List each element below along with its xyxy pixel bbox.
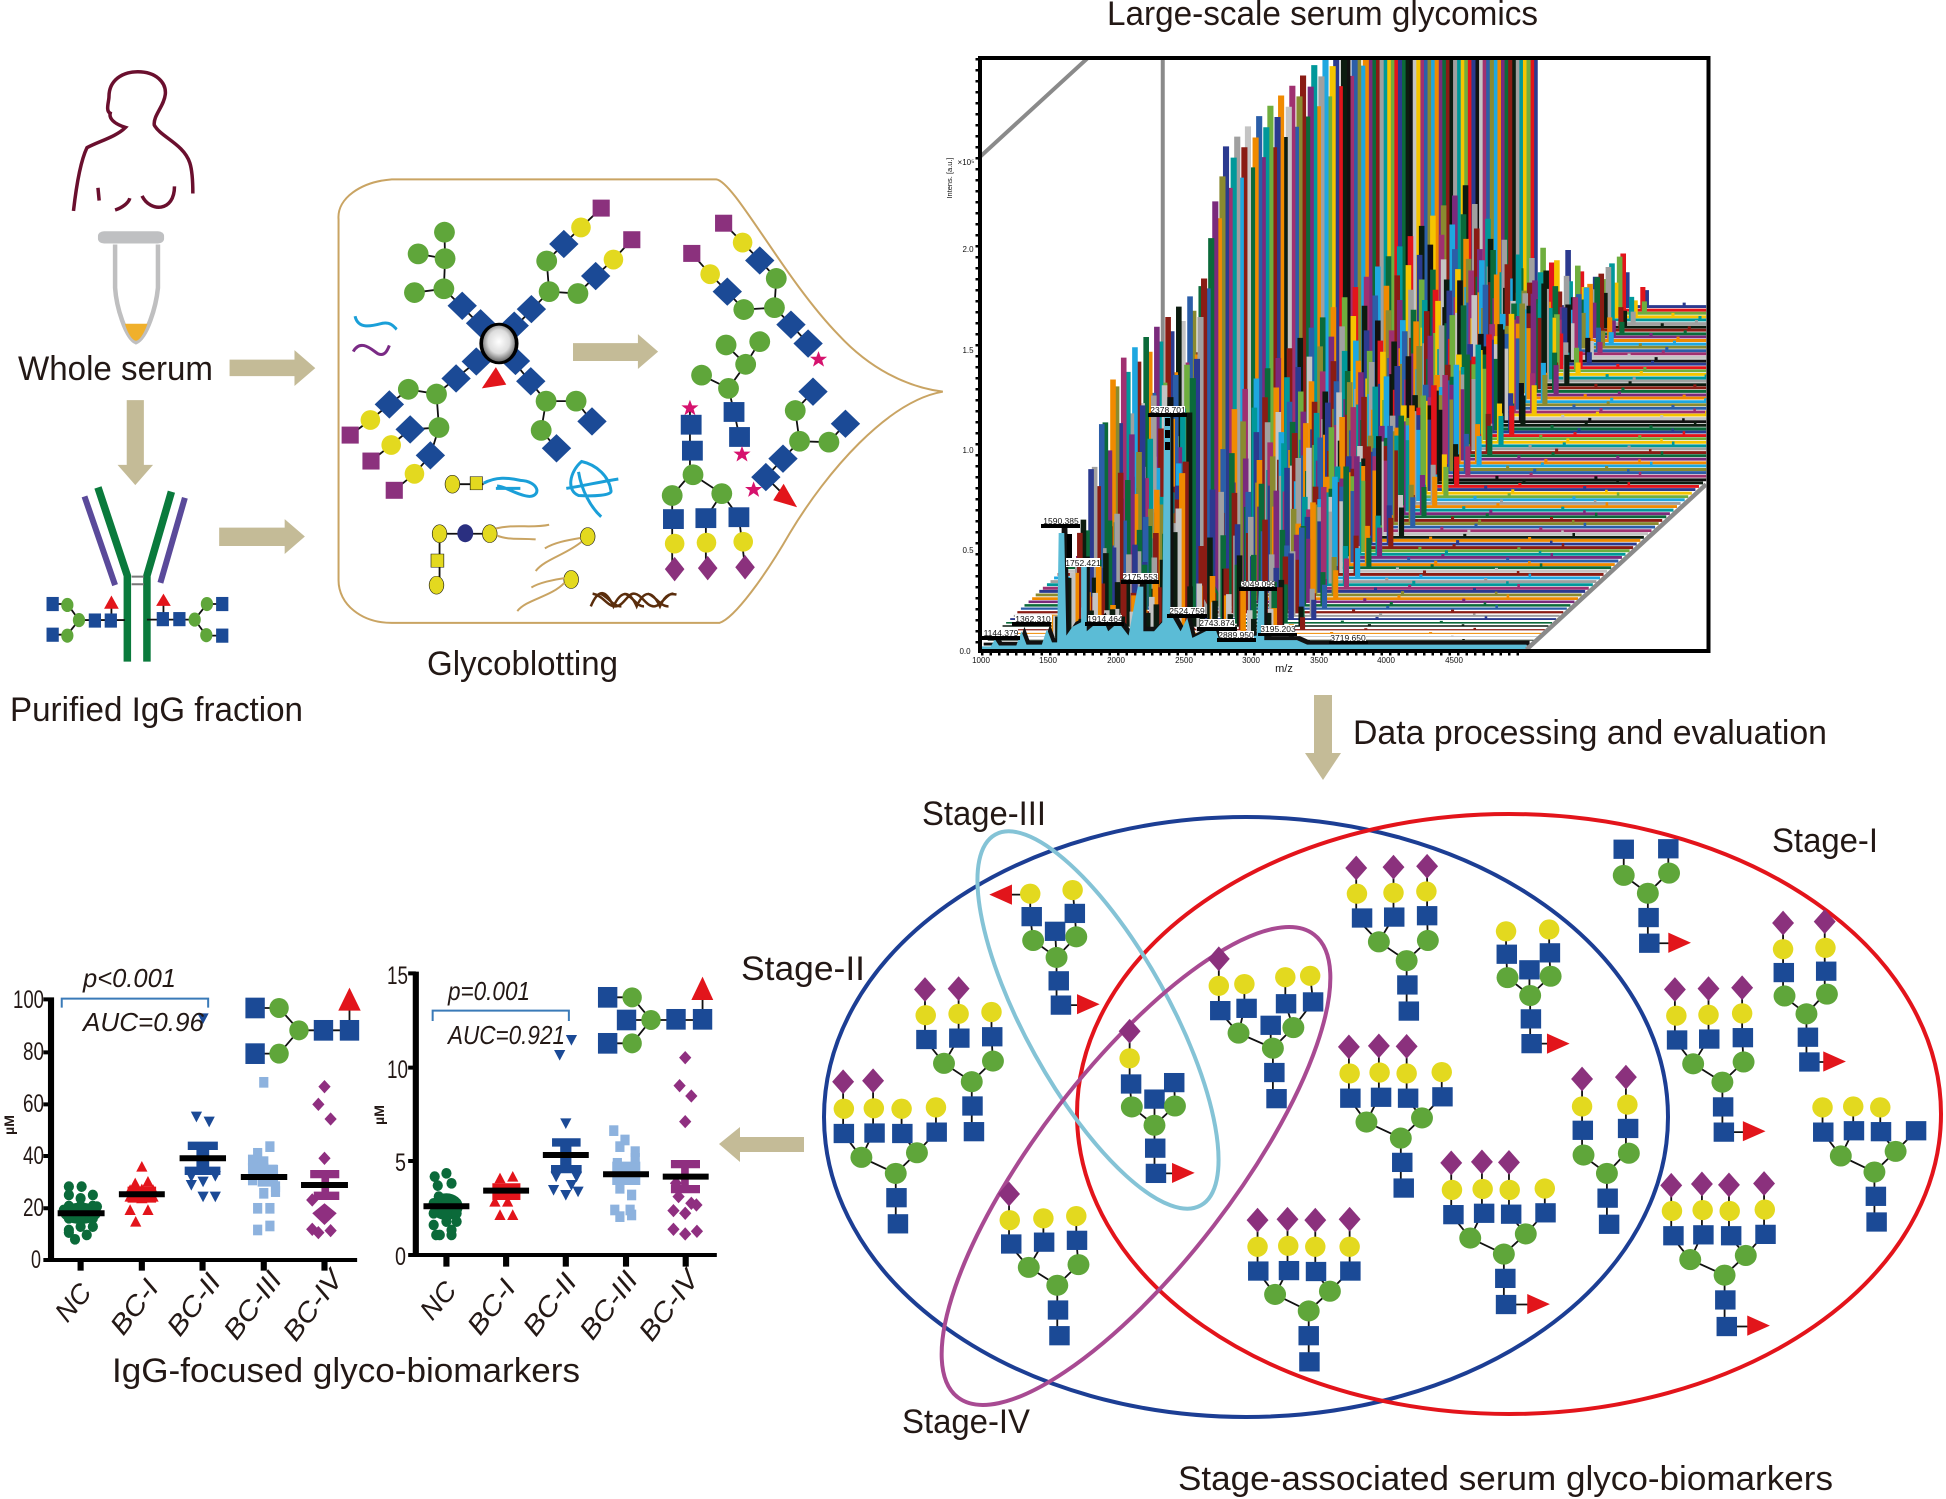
chart: IgG biomarker scatter 2: 5 xyxy=(395,1149,406,1177)
chart: IgG biomarker scatter 1: BC-IV xyxy=(277,1262,351,1347)
chart: IgG biomarker scatter 1: BC-III xyxy=(217,1265,288,1345)
heading: data processing and evaluation: Data processing and evaluation xyxy=(1353,714,1827,752)
axis labels: 1.0 xyxy=(962,446,974,455)
icon: released glycans xyxy=(662,215,860,581)
arrow: IgG to glycoblotting xyxy=(219,519,305,554)
axis labels: 3500 xyxy=(1310,656,1328,665)
chart: IgG biomarker scatter 1: NC xyxy=(49,1277,98,1327)
peak labels: 1362.310 xyxy=(1015,614,1051,624)
chart: IgG biomarker scatter 1 xyxy=(1,963,361,1347)
chart: IgG biomarker scatter 2: p=0.001 xyxy=(447,976,530,1006)
heading: stage-associated serum glyco-biomarkers: Stage-associated serum glyco-biomarkers xyxy=(1178,1460,1833,1498)
heading: whole serum: Whole serum xyxy=(18,350,213,388)
glycan: overlap bisected fucosylated xyxy=(1496,919,1570,1054)
glycan: stage-IV overlap tetraantennary xyxy=(1208,946,1323,1108)
chart: IgG biomarker scatter 2: 15 xyxy=(387,962,408,990)
chart: IgG biomarker scatter 2: AUC=0.921 xyxy=(446,1020,565,1050)
label: stage-III: Stage-III xyxy=(922,795,1046,833)
chart: IgG biomarker scatter 2: BC-I xyxy=(461,1273,522,1340)
chart: waterfall mass spectra xyxy=(946,56,1710,672)
chart: IgG biomarker scatter 1: 100 xyxy=(13,986,44,1014)
peak labels: 2889.950 xyxy=(1218,630,1254,640)
chart: IgG biomarker scatter 1: 60 xyxy=(23,1090,44,1118)
peak labels: 2378.701 xyxy=(1150,405,1186,415)
label: stage-I: Stage-I xyxy=(1772,822,1878,860)
axis labels: 2500 xyxy=(1175,656,1193,665)
chart: IgG biomarker scatter 1: BC-I xyxy=(104,1273,165,1340)
axis labels: 4000 xyxy=(1377,656,1395,665)
peak labels: 1752.421 xyxy=(1065,558,1101,568)
chart: IgG biomarker scatter 2: NC xyxy=(414,1275,463,1325)
axis labels: 1000 xyxy=(972,656,990,665)
chart: IgG biomarker scatter 1: 40 xyxy=(23,1142,44,1170)
heading: glycoblotting: Glycoblotting xyxy=(427,645,618,683)
peak labels: 1144.379 xyxy=(984,628,1019,638)
axis labels: 4500 xyxy=(1445,656,1463,665)
chart: IgG biomarker scatter 1: 20 xyxy=(23,1194,44,1222)
heading: purified IgG fraction: Purified IgG fraction xyxy=(10,691,303,729)
axis labels: m/z xyxy=(1275,663,1293,675)
chart: IgG biomarker scatter 2: 10 xyxy=(387,1056,408,1084)
glycan: stage-I tetrasialyl fucosylated xyxy=(1660,1171,1776,1336)
peak labels: 1590.385 xyxy=(1043,516,1079,526)
chart: IgG biomarker scatter 1: AUC=0.96 xyxy=(81,1007,205,1037)
chart: IgG biomarker scatter 2 xyxy=(371,962,717,1347)
axis labels: 0.5 xyxy=(962,546,974,555)
diagram: stage Venn with glycans xyxy=(824,800,1941,1457)
icon: IgG antibody xyxy=(47,487,228,662)
arrow: serum to IgG xyxy=(118,400,153,485)
glycan: stage-II tetraantennary xyxy=(832,1068,947,1233)
ellipse: stage-IV xyxy=(880,875,1392,1457)
chart: IgG biomarker scatter 1: BC-II xyxy=(161,1267,227,1342)
axis labels: 3000 xyxy=(1242,656,1260,665)
axis labels xyxy=(945,157,1463,675)
glycan: overlap triantennary top xyxy=(1345,854,1439,1021)
ellipse: stage-I xyxy=(1077,814,1941,1414)
chart: IgG biomarker scatter 2: BC-IV xyxy=(633,1262,707,1347)
chart: IgG biomarker scatter 1: µM xyxy=(1,1115,17,1135)
glycan: stage-I tetraantennary asialyl xyxy=(1812,1096,1926,1232)
panel: sample preparation and glycoblotting xyxy=(47,72,943,662)
glycan: overlap tetraantennary fucosylated xyxy=(1440,1150,1556,1314)
chart: IgG biomarker scatter 2: µM xyxy=(371,1105,387,1125)
peak labels: 2743.874 xyxy=(1199,618,1235,628)
ellipse: stage-II xyxy=(824,817,1668,1417)
peak labels: 2175.553 xyxy=(1122,572,1158,582)
arrow: spectra to data processing xyxy=(1305,695,1341,780)
axis labels: Intens. [a.u.] xyxy=(945,157,954,199)
glycan: stage-I trisialyl xyxy=(1664,975,1766,1142)
icon: serum tube xyxy=(98,231,164,342)
peak labels: 3049.099 xyxy=(1240,579,1276,589)
glycan: overlap tetrasialyl xyxy=(1247,1207,1361,1371)
axis labels: 1500 xyxy=(1039,656,1057,665)
peak labels: 1914.464 xyxy=(1087,614,1123,624)
glycan: overlap biantennary disialyl xyxy=(1571,1065,1640,1234)
arrow: serum to glycoblotting xyxy=(230,350,315,386)
arrow: venn to IgG biomarkers xyxy=(719,1127,804,1162)
peak labels: 3719.650 xyxy=(1330,633,1366,643)
panel: glycoblotting capsule outline xyxy=(338,179,943,623)
glycan: stage-IV triantennary xyxy=(998,1182,1089,1345)
axis labels: ×10⁵ xyxy=(958,158,974,167)
label: stage-II: Stage-II xyxy=(741,950,865,988)
chart: IgG biomarker scatter 1: 80 xyxy=(23,1038,44,1066)
icon: human silhouette xyxy=(73,72,193,211)
chart: IgG biomarker scatter 1: 0 xyxy=(31,1246,41,1274)
heading: IgG-focused glyco-biomarkers: IgG-focused glyco-biomarkers xyxy=(112,1352,580,1390)
peak labels: 2524.759 xyxy=(1169,606,1205,616)
chart: IgG biomarker scatter 2: 0 xyxy=(395,1243,406,1271)
chart: IgG biomarker scatter 2: BC-III xyxy=(573,1265,644,1345)
chart: IgG biomarker scatter 1: p<0.001 xyxy=(82,963,176,993)
glycan: stage-I small xyxy=(1613,839,1691,953)
label: stage-IV: Stage-IV xyxy=(902,1403,1030,1441)
axis labels: 0.0 xyxy=(959,647,971,656)
glycan: stage-I disialyl xyxy=(1772,909,1846,1072)
icon: bead with bound glycans xyxy=(342,200,640,499)
axis labels: 2000 xyxy=(1107,656,1125,665)
glycan: stage-III fucosylated xyxy=(989,880,1100,1015)
chart: IgG biomarker scatter 2: BC-II xyxy=(517,1267,583,1342)
glycan: overlap tetraantennary mid xyxy=(1338,1034,1453,1198)
icon: other serum molecules xyxy=(353,316,676,611)
axis labels: 2.0 xyxy=(962,245,974,254)
ellipse: stage-III xyxy=(932,800,1264,1240)
peak labels: 3195.203 xyxy=(1260,624,1296,634)
peak labels xyxy=(982,405,1368,644)
axis labels: 1.5 xyxy=(962,346,974,355)
glycan: overlap centre xyxy=(1119,1019,1195,1183)
glycan: stage-II triantennary xyxy=(914,976,1004,1141)
arrow: release glycans xyxy=(573,334,658,369)
